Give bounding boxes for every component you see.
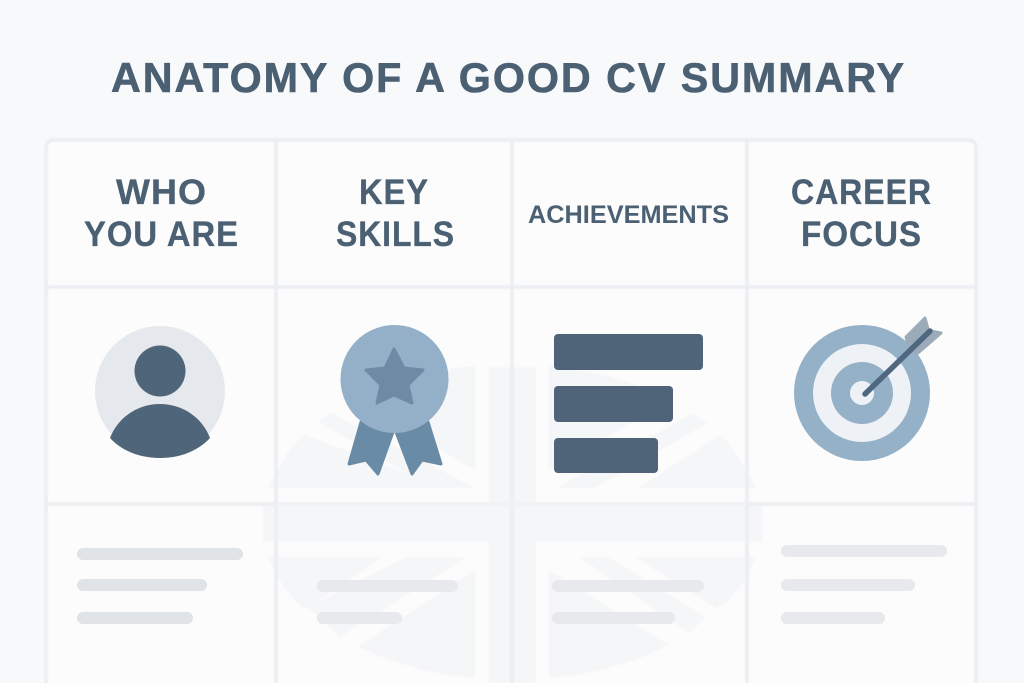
grid panel background [46,140,977,683]
heading: achievements: ACHIEVEMENTS [528,201,729,229]
icon: target with arrow [794,318,941,461]
text placeholder: who you are [77,548,243,624]
text placeholder: achievements [552,580,704,624]
heading: key skills [336,173,455,254]
icon: award ribbon [340,325,448,474]
heading: career focus: CAREER [791,173,932,212]
text placeholder: key skills [317,580,458,624]
icon: stacked bars [554,334,703,473]
heading: career focus: FOCUS [801,215,922,254]
heading: who you are: WHO [116,173,207,212]
heading: key skills: SKILLS [336,215,455,254]
text placeholder: career focus [781,545,947,624]
watermark: union flag [262,360,762,683]
heading: who you are [84,173,239,254]
heading: career focus [791,173,932,254]
grid lines [46,140,976,683]
heading: key skills: KEY [359,173,429,212]
title: ANATOMY OF A GOOD CV SUMMARY [111,54,906,101]
heading: who you are: YOU ARE [84,215,239,254]
icon: person [95,326,225,458]
